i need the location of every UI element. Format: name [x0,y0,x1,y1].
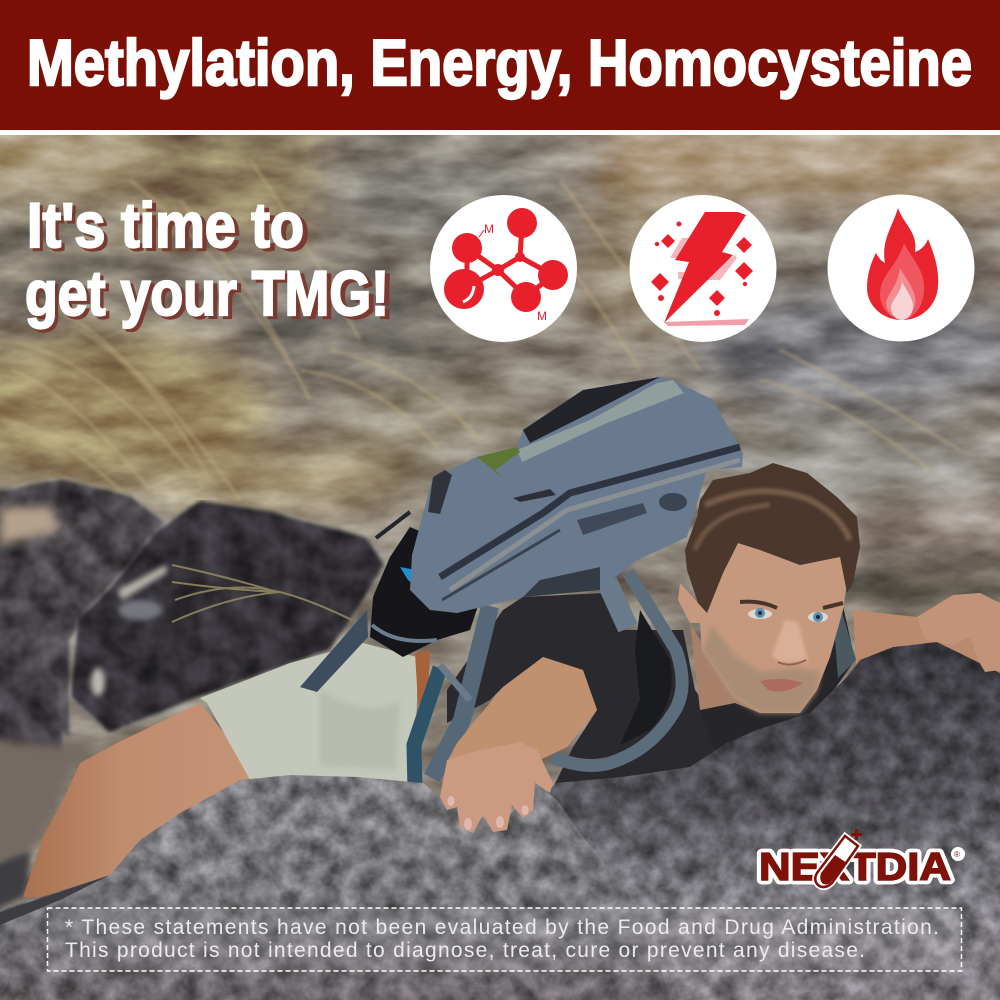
left rocks [0,478,167,750]
lower left rubble [0,735,100,870]
backpack lighter panel [517,380,684,462]
pocket band [372,625,437,641]
left hanging strap [300,610,368,692]
dark rock lip [0,875,110,925]
headline [25,191,394,332]
shoulder strap [552,572,682,765]
hair [685,463,860,613]
logo: NEXTDIA [759,829,965,889]
hand on rock [440,742,553,833]
leg [23,703,270,900]
headline: get your TMG! [28,262,394,332]
black t-shirt [447,593,715,786]
headline: get your TMG! [25,259,389,329]
grass seed head [172,565,352,622]
logo: NEXTDIA: NEXTDIA [759,846,951,889]
logo: NEXTDIA: NEXTDIA [759,846,951,889]
backpack dark top [523,377,660,443]
icon: energy bolt [630,195,776,342]
icon: methylation molecule: M [537,309,547,323]
icon: methylation molecule [430,195,577,342]
velcro patch [577,503,647,535]
far shoulder [710,607,854,729]
boulder highlights [91,565,168,696]
green trim [477,447,520,478]
headline: It's time to [30,194,309,264]
disclaimer text: This product is not intended to diagnose, treat, cure or prevent any disease. [65,939,865,962]
bolt shadow shapes [670,238,737,280]
stubble [702,625,820,713]
face [678,543,847,713]
headline: It's time to [27,191,304,261]
arm [447,657,597,770]
fingernails [448,796,528,830]
neck [690,623,760,713]
tan patch [0,506,60,545]
icon: test tube [815,829,862,887]
climber [23,377,1000,900]
mesh pocket [370,527,480,657]
dark boulder [70,500,385,733]
backpack body [410,377,743,613]
icon: methylation molecule: M [484,222,494,236]
disclaimer box [48,908,962,971]
far arm [853,593,1000,673]
pack buckle detail [428,470,452,514]
bolt base line [664,319,749,326]
waist straps [414,606,490,790]
shorts [200,643,417,782]
sparkles [651,222,753,316]
eyes and mouth [740,602,843,691]
foreground rock right [500,642,1000,1000]
blue mesh accent [400,567,412,582]
logo: NEXTDIA: ® [954,850,960,859]
foreground rock left [0,775,670,1000]
grass streaks [0,160,960,500]
hip skin [415,650,430,703]
header banner [0,0,1000,135]
disclaimer text: * These statements have not been evaluated by the Food and Drug Administration. [65,916,939,939]
lower pack shadow [523,567,600,597]
nose highlight [772,620,808,662]
icon: flame [828,194,974,342]
far hand on rock [917,593,1000,672]
zipper bands [440,447,740,600]
bolt [664,212,746,323]
